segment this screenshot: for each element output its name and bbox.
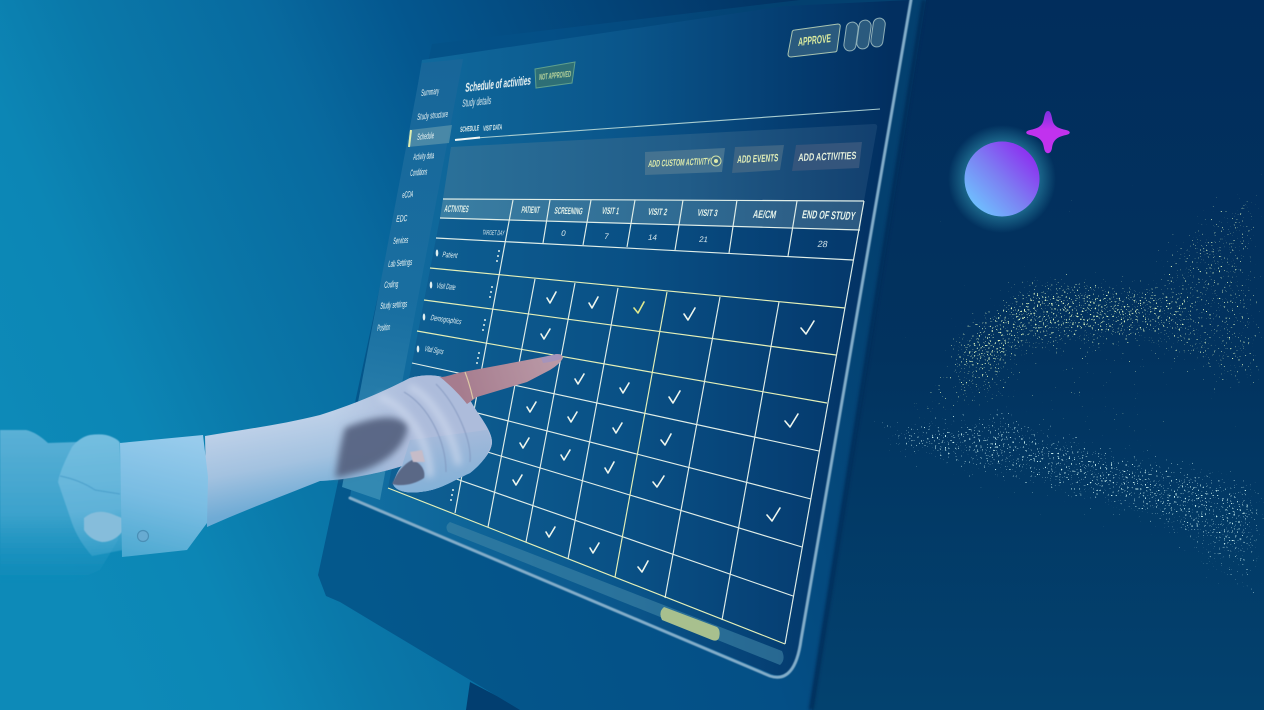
table grid lines [388, 199, 864, 644]
pointing hand and arm [0, 354, 563, 590]
selected marker [409, 130, 411, 147]
target day row: 21 [698, 235, 709, 244]
sleeve fold opening [84, 512, 122, 542]
target day row [482, 229, 829, 249]
table body tint [388, 218, 860, 644]
fist lower tone [393, 430, 491, 493]
add events: ADD EVENTS [737, 152, 779, 166]
screen [350, 0, 910, 675]
target day row: 0 [560, 229, 567, 238]
sidebar panel [342, 59, 463, 500]
fold crease [60, 476, 120, 494]
sidebar labels: Activity data [413, 150, 435, 162]
rolled sleeve [58, 434, 123, 556]
row menu dots [450, 250, 500, 501]
sidebar labels: Coding [384, 279, 399, 290]
index finger [440, 354, 563, 404]
target day row: 14 [647, 233, 658, 242]
sidebar labels: Study settings [380, 299, 408, 311]
sidebar labels: Position [377, 322, 391, 333]
ring [465, 372, 473, 399]
column headers [443, 204, 857, 223]
row labels: Demographics [429, 313, 463, 326]
glow [948, 125, 1056, 233]
not approved badge [535, 62, 575, 88]
not approved badge: NOT APPROVED [539, 70, 571, 82]
sidebar labels: Study structure [417, 109, 449, 122]
monitor body [318, 0, 926, 710]
curled finger shadow [392, 460, 424, 485]
sidebar labels: Schedule [417, 130, 435, 142]
page header: VISIT DATA [483, 122, 503, 133]
sidebar labels: EDC [396, 213, 408, 224]
action buttons [645, 142, 862, 175]
column headers: PATIENT [520, 205, 541, 216]
add events [732, 145, 784, 173]
page header [455, 17, 886, 140]
schedule table [388, 199, 864, 644]
column headers: VISIT 3 [696, 208, 719, 219]
shirt sleeve [0, 430, 118, 590]
target day row: TARGET DAY [482, 230, 505, 237]
knuckle highlights [382, 388, 458, 474]
row labels [423, 250, 463, 356]
tabs: SCHEDULE [460, 123, 480, 134]
skin: arm and hand [205, 375, 492, 527]
sidebar background [342, 59, 463, 500]
add activities: ADD ACTIVITIES [798, 150, 857, 164]
scrollbar thumb [660, 607, 720, 641]
particle cloud: upper band [900, 170, 1264, 450]
monitor dark side edge [811, 0, 924, 710]
fist tone [330, 375, 492, 493]
table header row [440, 199, 864, 230]
approve button: APPROVE [798, 33, 831, 49]
column headers: END OF STUDY [801, 209, 857, 223]
sidebar labels: Lab Settings [388, 257, 413, 269]
sidebar labels: Summary [421, 86, 440, 98]
target day row: 7 [603, 232, 610, 241]
add custom activity: ADD CUSTOM ACTIVITY [648, 156, 711, 170]
monitor [318, 0, 926, 710]
shirt cuff [120, 435, 208, 557]
target day row: 28 [817, 239, 829, 249]
page header: Study details [462, 95, 492, 110]
column headers: AE/CM [752, 209, 777, 221]
title: Schedule of activities [465, 73, 532, 95]
add custom activity [645, 148, 725, 175]
fingernail [541, 354, 561, 363]
orb [964, 142, 1040, 216]
check marks [513, 292, 814, 572]
right background shade [800, 0, 1264, 710]
column headers: VISIT 1 [601, 206, 620, 217]
active tab underline [455, 138, 480, 140]
sidebar labels: Conditions [410, 166, 428, 178]
monitor stand [466, 682, 524, 710]
knuckle fold [410, 450, 425, 462]
bezel highlight [350, 0, 911, 677]
four-point star [1026, 111, 1070, 153]
sparkle logo [948, 111, 1070, 233]
column headers: SCREENING [553, 206, 584, 217]
finger creases [404, 384, 470, 472]
add activities [792, 142, 862, 171]
particle cloud: lower band [870, 410, 1264, 610]
menu pills [843, 17, 886, 52]
column headers: VISIT 2 [647, 207, 668, 218]
cuff button [138, 530, 148, 542]
selected sidebar item [408, 125, 452, 147]
sidebar labels: Services [393, 235, 409, 246]
approve button [788, 24, 840, 57]
sidebar labels: eCOA [402, 189, 414, 200]
row labels: Visit Date [435, 281, 457, 292]
column headers: ACTIVITIES [443, 204, 470, 215]
row icons [417, 250, 438, 352]
tab divider [455, 109, 880, 140]
table panel background [443, 124, 877, 201]
scrollbar [446, 522, 784, 665]
row labels: Vital Signs [423, 344, 445, 356]
scrollbar track [446, 522, 784, 665]
row labels: Patient [442, 250, 459, 260]
sidebar labels [377, 86, 449, 333]
back of hand shadow [335, 418, 408, 478]
